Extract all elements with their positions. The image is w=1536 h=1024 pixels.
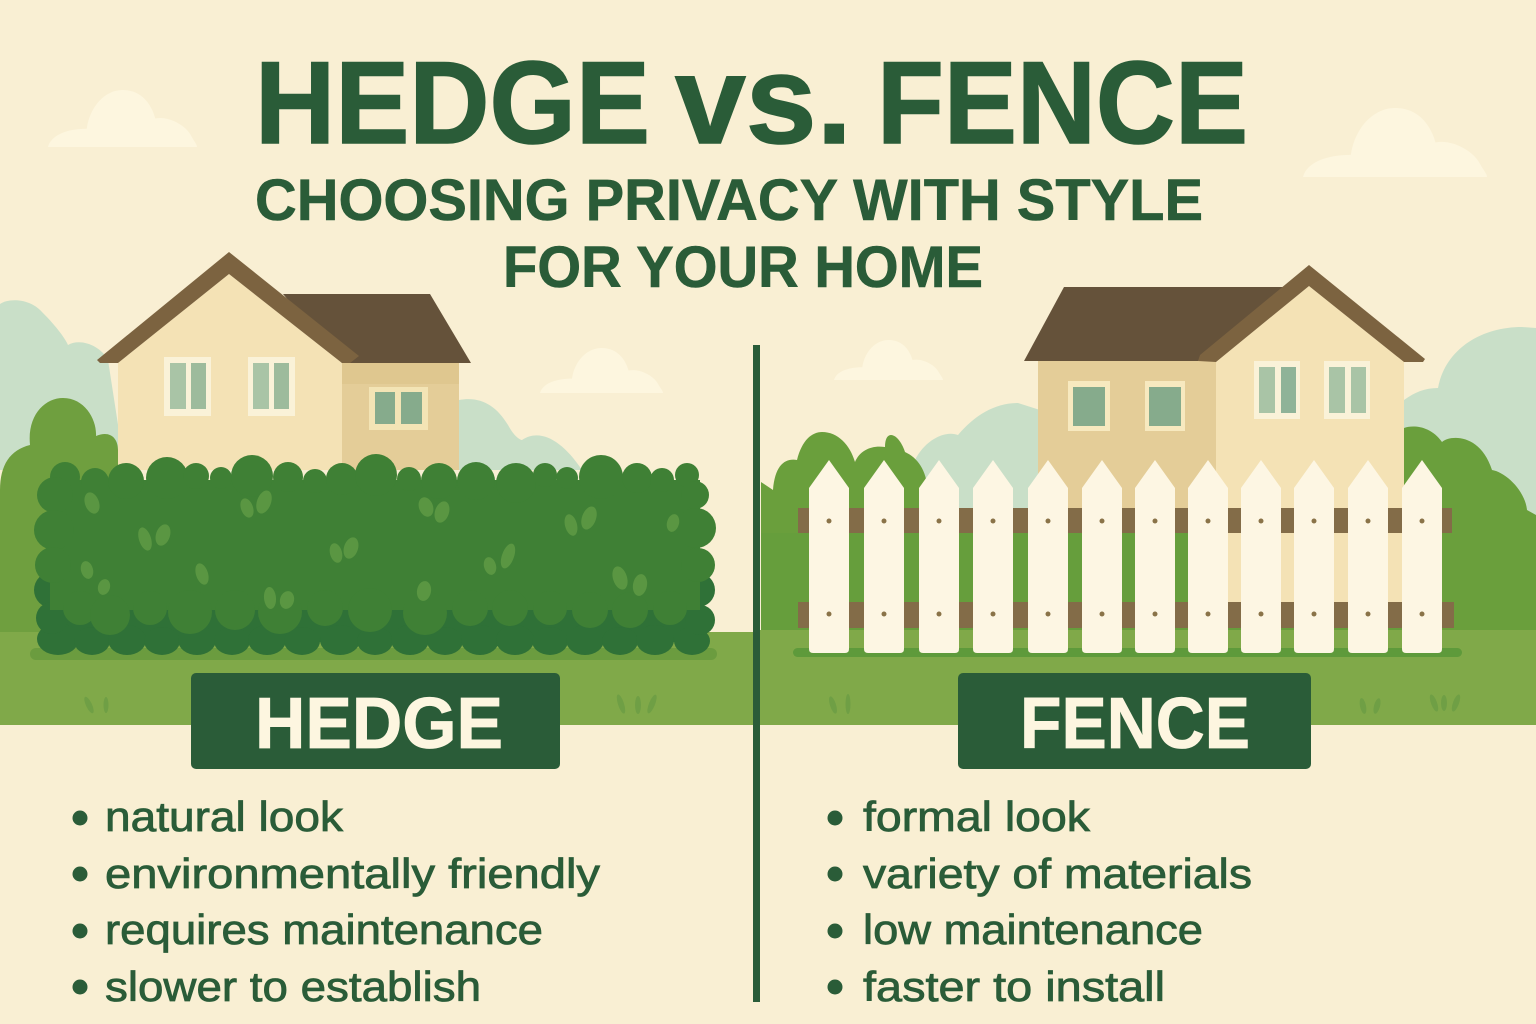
house: main wall	[118, 274, 342, 470]
right green strip below wall	[1216, 600, 1406, 632]
house: windows	[164, 357, 428, 430]
title	[255, 31, 1248, 170]
pale background trees, right	[915, 327, 1536, 520]
grass tufts, right	[827, 694, 1462, 715]
cloud: top right	[1303, 108, 1487, 177]
subtitle	[255, 168, 1203, 300]
title: HEDGE	[255, 37, 650, 168]
subtitle: CHOOSING PRIVACY WITH STYLE	[255, 168, 1203, 233]
house: gable roof	[97, 252, 359, 363]
label: fence: FENCE	[1020, 684, 1250, 764]
house: dark roof	[1024, 287, 1283, 361]
hedge shadow	[30, 648, 717, 660]
divider line	[753, 345, 760, 1002]
house: gable roof	[1198, 265, 1425, 362]
house: side wall	[1038, 361, 1216, 533]
pale background trees, left	[0, 300, 582, 470]
list: fence traits: formal look	[863, 793, 1091, 840]
list: fence traits: variety of materials	[863, 850, 1252, 897]
list: hedge traits: slower to establish	[105, 963, 481, 1010]
hedge body	[34, 454, 716, 635]
house: windows	[1068, 361, 1370, 431]
cloud: middle right	[834, 340, 943, 380]
list: hedge traits: requires maintenance	[105, 906, 543, 953]
hedge	[30, 454, 717, 660]
label: hedge	[191, 673, 560, 769]
hedge leaves	[79, 488, 681, 611]
fence pickets	[809, 460, 1442, 653]
lawn	[760, 630, 1536, 725]
title: vs.	[675, 31, 852, 170]
list: fence traits: low maintenance	[863, 906, 1203, 953]
label: fence	[958, 673, 1311, 769]
hedge dark base	[34, 572, 715, 655]
house: main wall	[1216, 286, 1404, 602]
middle green strip	[761, 533, 1221, 633]
label: hedge: HEDGE	[255, 684, 503, 764]
fence nails	[826, 518, 1424, 616]
fence rails	[798, 508, 1454, 628]
title: FENCE	[877, 37, 1248, 168]
cloud: middle left	[540, 348, 663, 393]
house: dark roof	[283, 294, 471, 363]
green bushes, left	[0, 398, 118, 632]
house: side wall	[342, 363, 459, 470]
list: fence traits: faster to install	[863, 963, 1165, 1010]
panel: fence scene	[760, 265, 1536, 725]
panel: hedge scene	[0, 252, 754, 725]
grass tufts, left	[82, 694, 659, 714]
list: hedge traits: natural look	[105, 793, 344, 840]
list: hedge traits	[72, 793, 600, 1010]
list: hedge traits: environmentally friendly	[105, 850, 600, 897]
subtitle: FOR YOUR HOME	[503, 235, 983, 300]
green bushes, fence side	[761, 426, 1536, 630]
lawn	[0, 632, 754, 725]
fence shadow	[793, 648, 1462, 657]
cloud: top left	[48, 90, 197, 147]
list: fence traits	[828, 793, 1252, 1010]
